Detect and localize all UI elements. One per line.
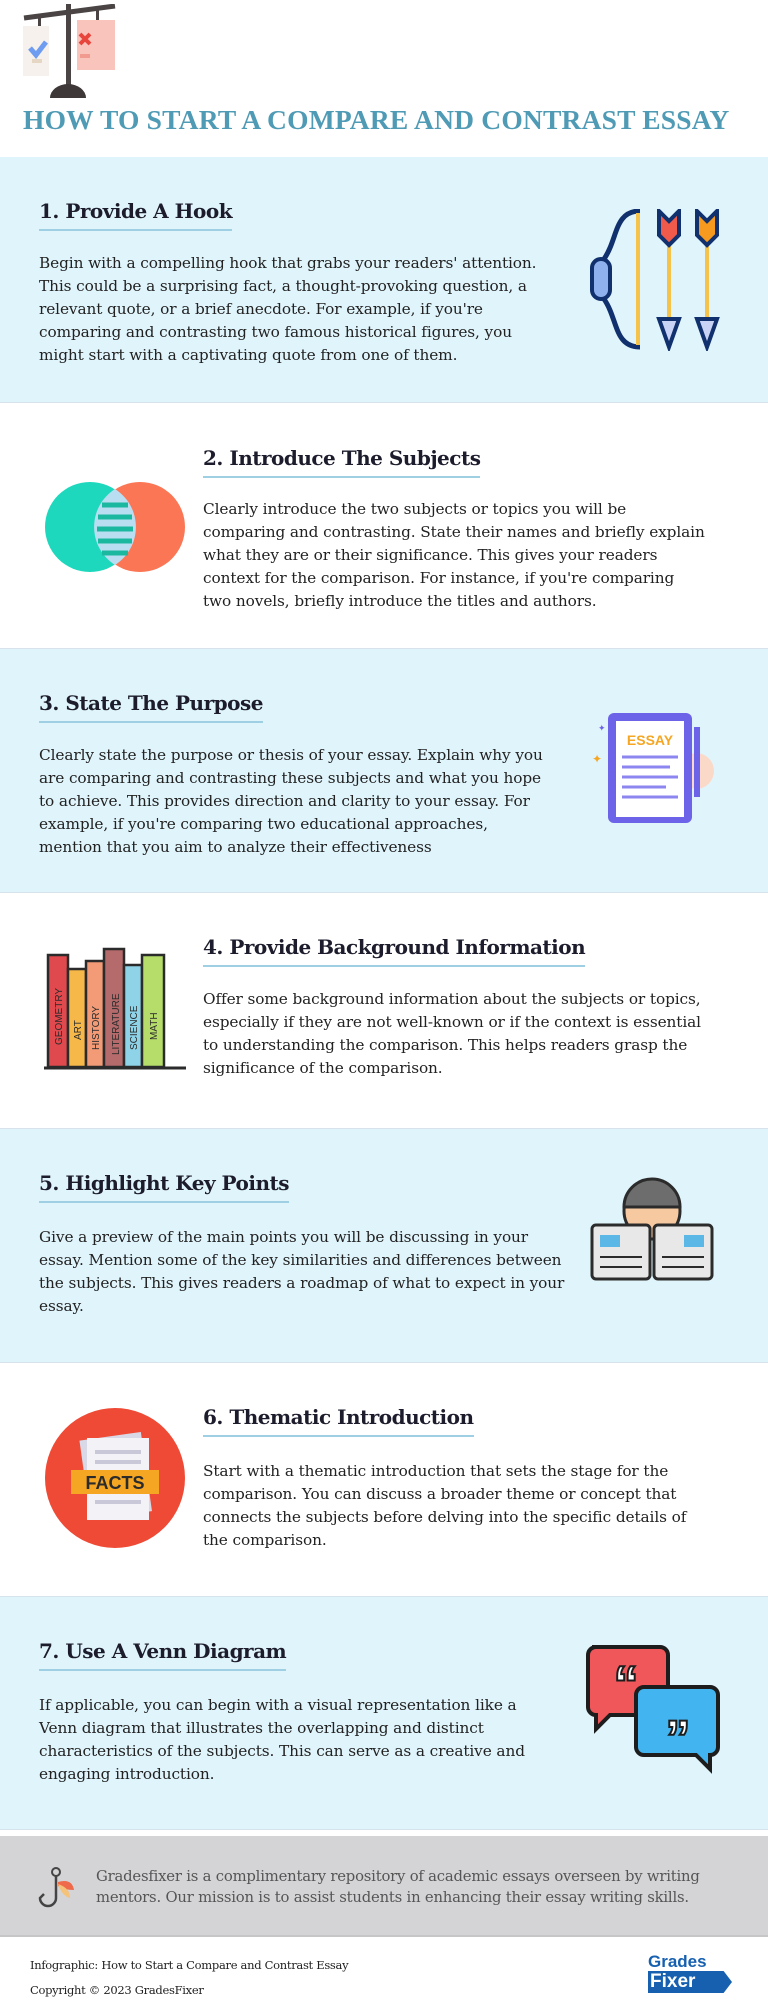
icon: bow and arrows xyxy=(590,209,720,351)
heading 2: 2. Introduce The Subjects xyxy=(203,446,480,470)
text 7: If applicable, you can begin with a visual representation like a Venn diagram that illustrates the overlapping and distinct characteristics of the subjects. This can serve as a creative and engaging introduction. xyxy=(39,1696,525,1783)
icon: books: ART xyxy=(73,1020,84,1040)
heading 6: 6. Thematic Introduction xyxy=(203,1405,474,1429)
footer text: Gradesfixer is a complimentary repository of academic essays overseen by writing mentors. Our mission is to assist students in enhancing their essay writing skills. xyxy=(96,1868,700,1906)
icon: books xyxy=(44,948,186,1070)
heading 1: 1. Provide A Hook xyxy=(39,199,232,223)
icon: essay clipboard: ESSAY xyxy=(627,732,674,748)
icon: books: HISTORY xyxy=(91,1006,102,1050)
panel: 5 highlight key points xyxy=(0,1129,768,1363)
icon: quote bubbles: ” xyxy=(666,1710,690,1766)
heading 5: 5. Highlight Key Points xyxy=(39,1171,289,1195)
text 5: Give a preview of the main points you will be discussing in your essay. Mention some of the key similarities and differences between the subjects. This gives readers a roadmap of what to expect in your essay. xyxy=(39,1228,564,1315)
icon: facts circle xyxy=(45,1408,185,1548)
icon: venn circles xyxy=(45,482,185,572)
panel: 7 use a venn diagram xyxy=(0,1597,768,1830)
title: HOW TO START A COMPARE AND CONTRAST ESSAY xyxy=(23,104,729,135)
icon: books: SCIENCE xyxy=(129,1005,140,1050)
footer: about gradesfixer xyxy=(0,1836,768,1937)
logo: gradesfixer xyxy=(648,1952,732,1993)
icon: essay clipboard: ✦ xyxy=(592,752,602,766)
heading 4: 4. Provide Background Information xyxy=(203,935,585,959)
text 4: Offer some background information about the subjects or topics, especially if they are not well-known or if the context is essential to understanding the comparison. This helps readers grasp the significance of the comparison. xyxy=(203,990,701,1077)
icon: facts circle: FACTS xyxy=(85,1473,145,1493)
icon: essay clipboard: ✦ xyxy=(598,724,606,734)
panel: 4 provide background information xyxy=(0,893,768,1129)
icon: essay clipboard xyxy=(592,713,714,823)
panel: 6 thematic introduction xyxy=(0,1363,768,1597)
heading 3: 3. State The Purpose xyxy=(39,691,263,715)
logo: gradesfixer: Grades xyxy=(648,1952,707,1971)
icon: books: LITERATURE xyxy=(111,993,122,1055)
panel: 3 state the purpose xyxy=(0,649,768,893)
heading 7: 7. Use A Venn Diagram xyxy=(39,1639,286,1663)
bottom credits: Copyright © 2023 GradesFixer xyxy=(30,1983,204,1997)
icon: person reading newspaper xyxy=(590,1178,714,1280)
text 1: Begin with a compelling hook that grabs your readers' attention. This could be a surprising fact, a thought-provoking question, a relevant quote, or a brief anecdote. For example, if you're comparing and contrasting two famous historical figures, you might start with a captivating quote from one of them. xyxy=(39,254,536,364)
icon: fishing hook xyxy=(38,1867,74,1908)
icon: quote bubbles: “ xyxy=(614,1656,638,1712)
icon: books: MATH xyxy=(149,1012,160,1040)
text 2: Clearly introduce the two subjects or topics you will be comparing and contrasting. State their names and briefly explain what they are or their significance. This gives your readers context for the comparison. For instance, if you're comparing two novels, briefly introduce the titles and authors. xyxy=(203,500,705,610)
panel: 2 introduce the subjects xyxy=(0,403,768,649)
text 3: Clearly state the purpose or thesis of your essay. Explain why you are comparing and contrasting these subjects and what you hope to achieve. This provides direction and clarity to your essay. For example, if you're comparing two educational approaches, mention that you aim to analyze their effectiveness xyxy=(39,746,543,856)
logo: gradesfixer: Fixer xyxy=(650,1971,695,1992)
header icon: balance scale xyxy=(23,4,116,98)
bottom credits xyxy=(30,1958,349,1997)
text 6: Start with a thematic introduction that sets the stage for the comparison. You can discuss a broader theme or concept that connects the subjects before delving into the specific details of the comparison. xyxy=(203,1462,686,1549)
bottom credits: Infographic: How to Start a Compare and Contrast Essay xyxy=(30,1958,348,1972)
panel: 1 provide a hook xyxy=(0,157,768,403)
icon: books: GEOMETRY xyxy=(54,988,65,1045)
icon: quote bubbles xyxy=(586,1645,720,1774)
